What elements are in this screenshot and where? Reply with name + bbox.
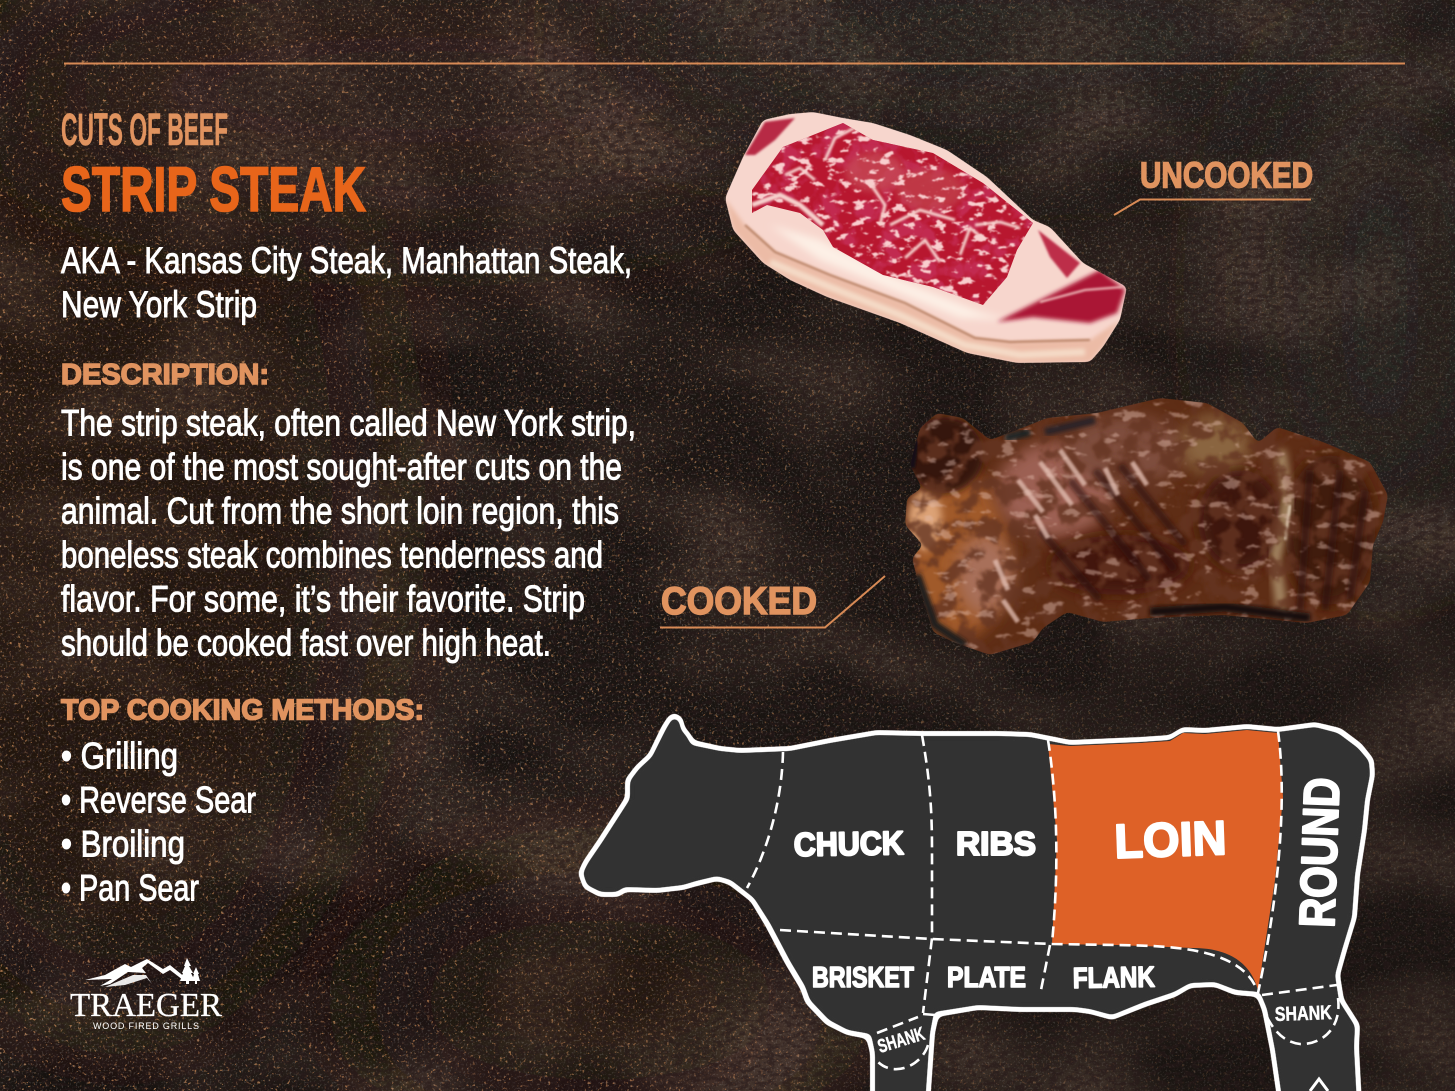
description body: flavor. For some, it’s their favorite. Strip: [61, 578, 585, 620]
wordmark: TRAEGER: [70, 987, 222, 1024]
label: flank: FLANK: [1073, 962, 1155, 995]
fat seam: [1275, 450, 1288, 610]
highlighted loin: [1048, 730, 1283, 990]
glossy highlights: [995, 450, 1147, 622]
cow outline: [580, 715, 1373, 1091]
icon: mountains and trees: [85, 958, 200, 987]
cooking methods list: • Reverse Sear: [61, 780, 256, 820]
top rule: [64, 62, 1405, 64]
description body: animal. Cut from the short loin region, this: [61, 490, 619, 532]
light centre glaze: [997, 442, 1113, 538]
uncooked steak photo: [720, 105, 1132, 367]
heading: top cooking methods: TOP COOKING METHODS:: [61, 694, 424, 726]
aka names: New York Strip: [61, 284, 257, 325]
label: chuck: CHUCK: [793, 824, 904, 863]
main muscle: [752, 123, 1033, 305]
logo: Traeger: [70, 958, 222, 1031]
beef cuts diagram: [580, 715, 1373, 1091]
title: strip steak: STRIP STEAK: [61, 155, 366, 225]
leader line: [660, 576, 885, 628]
marbling streaks: [752, 125, 1020, 262]
description body: The strip steak, often called New York strip,: [61, 402, 636, 444]
label: rear shank: SHANK: [1274, 1002, 1333, 1026]
leader line: [1114, 200, 1311, 215]
cooked steak photo: [900, 395, 1392, 660]
label: COOKED: [661, 580, 817, 623]
label: loin: LOIN: [1114, 812, 1227, 869]
tagline: WOOD FIRED GRILLS: [93, 1021, 199, 1031]
description body: boneless steak combines tenderness and: [61, 534, 603, 576]
label: plate: PLATE: [947, 962, 1026, 994]
fat side band: [725, 198, 1120, 363]
cow silhouette: [583, 718, 1370, 1091]
label: brisket: BRISKET: [812, 962, 914, 994]
label: ribs: RIBS: [956, 825, 1036, 862]
charred rim: [917, 575, 965, 645]
cooking methods list: • Broiling: [61, 824, 185, 864]
cooking methods list: [61, 736, 256, 908]
label: UNCOOKED: [1140, 154, 1313, 196]
aka names: AKA - Kansas City Steak, Manhattan Steak,: [61, 240, 632, 281]
top corner muscle: [745, 118, 795, 155]
dark knob: [907, 417, 983, 493]
dark seared regions: [1198, 470, 1282, 570]
heading: description: DESCRIPTION:: [61, 359, 269, 391]
left orange edge: [908, 470, 1008, 640]
label: round: ROUND: [1289, 777, 1350, 928]
text column: [61, 104, 636, 908]
grill marks: [1040, 465, 1365, 610]
label: front shank: SHANK: [875, 1024, 928, 1058]
eyebrow: cuts of beef: CUTS OF BEEF: [61, 104, 228, 155]
callout: uncooked: [1114, 154, 1313, 215]
mottling and gloss: [900, 395, 1392, 660]
cut lines: [747, 731, 1338, 1091]
secondary muscle: [1038, 230, 1080, 278]
description body: should be cooked fast over high heat.: [61, 622, 551, 664]
pale fat: [779, 228, 996, 320]
description body: [61, 402, 636, 664]
cooking methods list: • Pan Sear: [61, 868, 199, 908]
aka names: [61, 240, 632, 325]
callout: cooked: [660, 576, 885, 628]
cooking methods list: • Grilling: [61, 736, 178, 776]
description body: is one of the most sought-after cuts on the: [61, 446, 622, 488]
